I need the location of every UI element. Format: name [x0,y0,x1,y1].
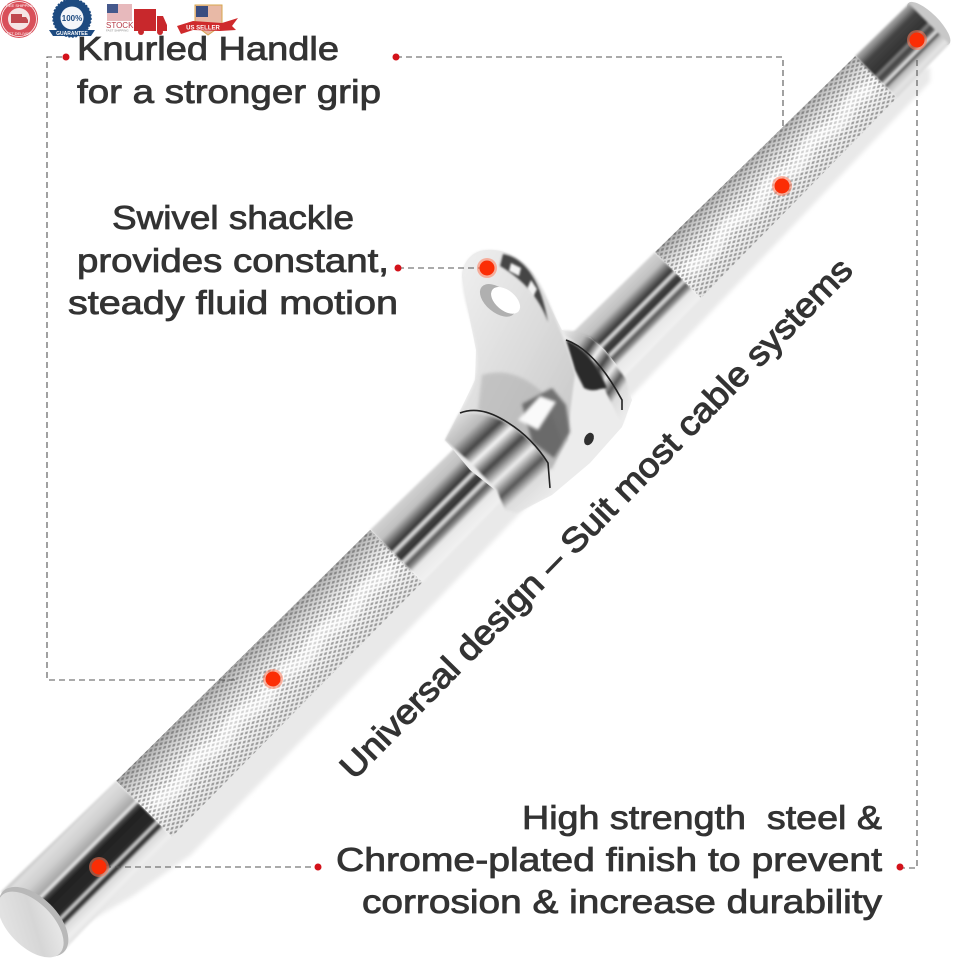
callout: swivel shackle: provides constant, [77,242,389,279]
lower collar [445,414,552,513]
dashed leader lines [47,57,917,868]
badge: US stock truck [106,4,167,35]
callout: steel and chrome finish: Chrome-plated finish to prevent [336,841,882,878]
upper tube section [566,251,702,387]
callout: knurled handle [77,30,381,110]
collar seam lines [460,340,622,488]
callout: swivel shackle: steady fluid motion [68,284,398,321]
badge: 100% guarantee [49,0,95,37]
upper knurled grip [655,54,899,298]
lower bar end [1,779,175,953]
collar recess [566,340,607,390]
badge: free shipping: FREE SHIPPING [4,3,34,8]
shackle fin [458,250,575,470]
shackle hole [474,275,525,324]
fin rim highlights [500,254,548,322]
callout: swivel shackle [68,199,398,321]
badge: free shipping: FAST DELIVERY [4,31,35,36]
callout: knurled handle: Knurled Handle [77,30,339,67]
hub body shading [478,372,563,470]
badge: free shipping [0,0,38,38]
callout: steel and chrome finish: corrosion & increase durability [362,883,883,920]
red marker dots on the bar [89,30,927,877]
end cap [0,874,81,960]
badge: 100% guarantee: 100% [62,14,82,23]
diagonal caption: Universal design – Suit most cable systems [333,251,860,787]
lower knurled grip [116,528,425,837]
badge: US seller: US SELLER [186,26,221,32]
badge: US seller [177,5,238,35]
badge: US stock truck: STOCK [106,21,134,30]
lower tube section [370,443,509,582]
hub silhouette [445,250,632,513]
badge: US stock truck: FAST SHIPPING [106,28,129,32]
callout: steel and chrome finish: High strength steel & [522,799,882,836]
small red anchor dots [62,54,904,870]
badge: 100% guarantee: GUARANTEE [56,31,88,37]
callout: swivel shackle: Swivel shackle [112,199,354,236]
callout: knurled handle: for a stronger grip [77,73,381,110]
set screw [582,431,596,447]
upper bar end [855,0,957,98]
upper collar [562,330,629,425]
swivel hub and shackle [445,250,632,513]
callout: steel and chrome finish [336,799,883,920]
